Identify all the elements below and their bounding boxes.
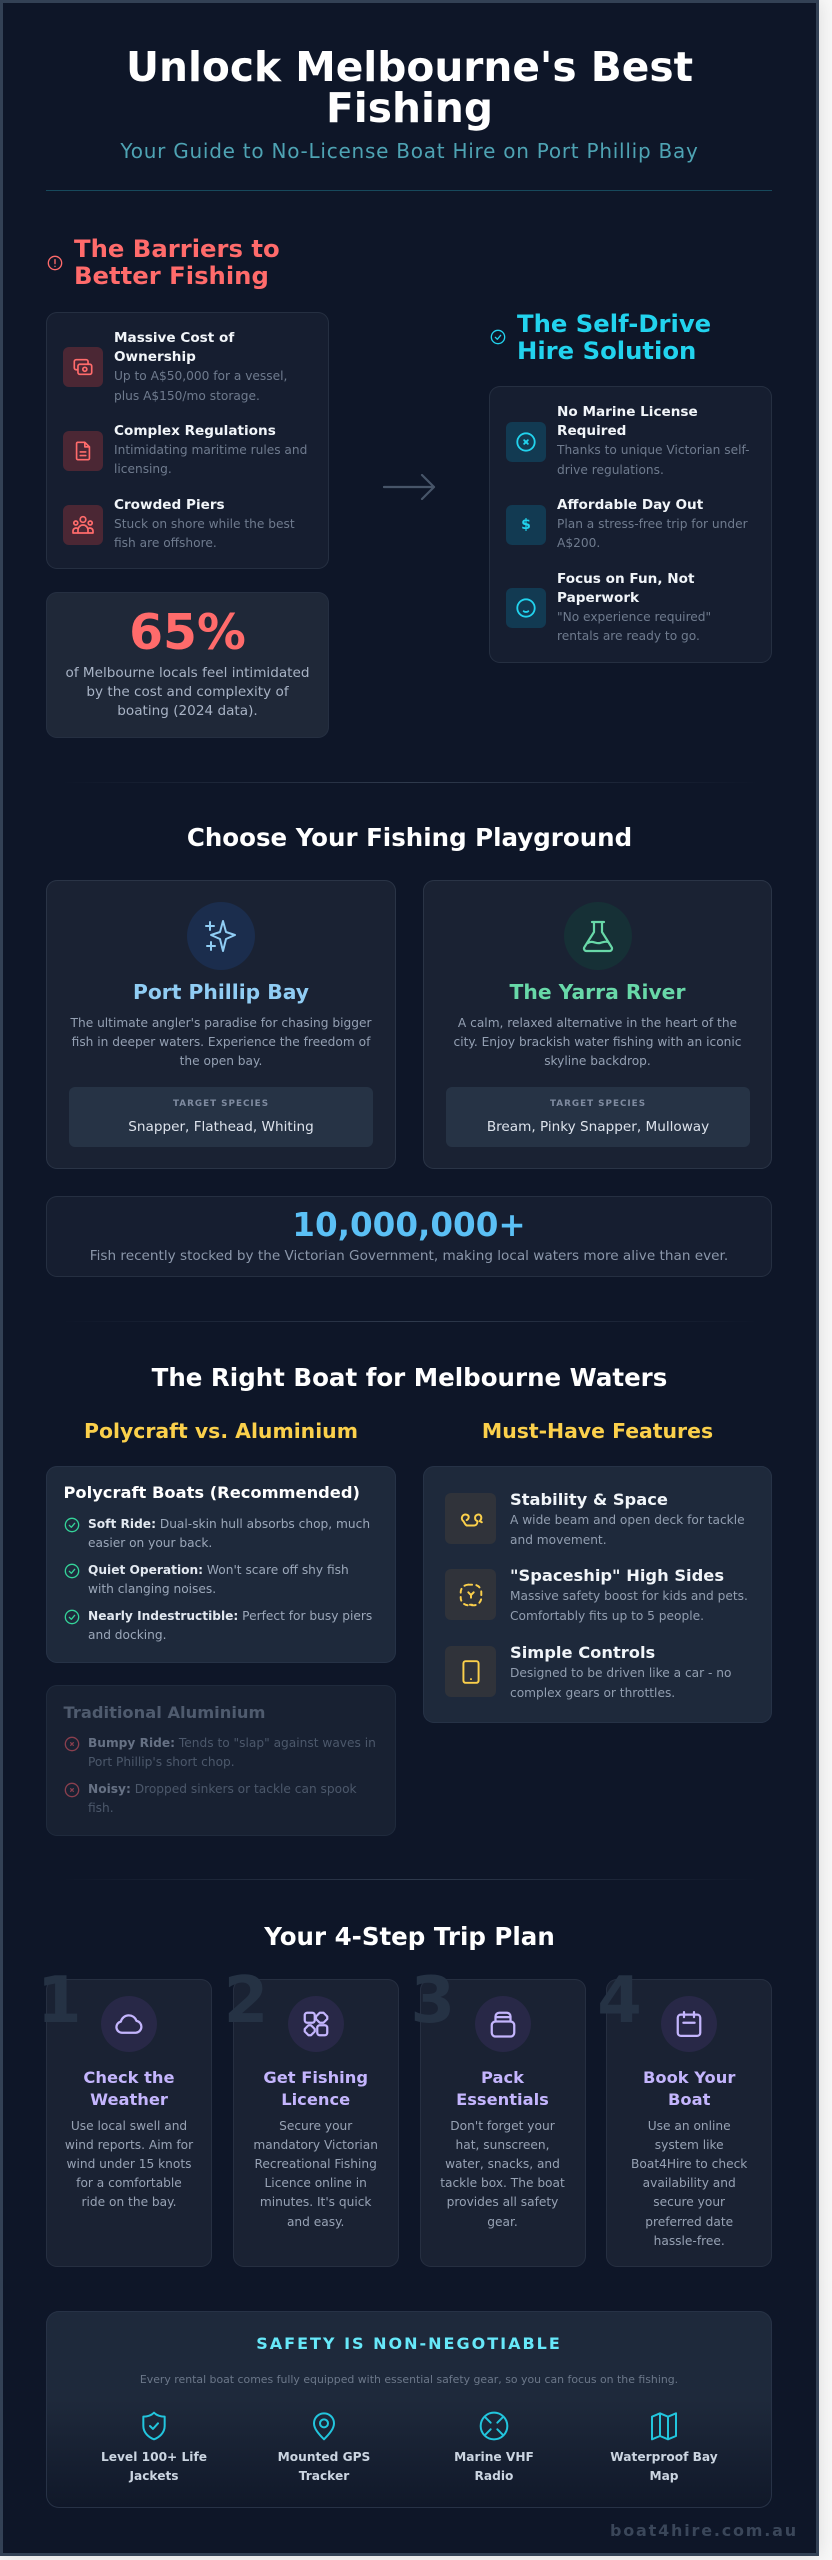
step 4 (606, 1979, 772, 2267)
icon: licence grid (288, 1996, 344, 2052)
text: regulations: Complex Regulations (114, 423, 276, 439)
pro: quiet: with clanging noises. (88, 1582, 216, 1596)
text: stability: Stability & Space (510, 1490, 668, 1509)
step text (631, 2118, 748, 2248)
icon: smile (506, 588, 546, 628)
step number: 2 (224, 1964, 268, 2038)
step title (456, 2068, 549, 2109)
item: crowded piers (63, 497, 295, 550)
pro: quiet: Quiet Operation: Won't scare off shy fish (88, 1563, 349, 1577)
text: regulations: Intimidating maritime rules and (114, 443, 307, 457)
target species (69, 1087, 373, 1147)
label: Tracker (299, 2469, 349, 2483)
panel: features (423, 1466, 772, 1723)
icon: money (63, 347, 103, 387)
step text: wind reports. Aim for (65, 2138, 193, 2152)
step title: Pack (481, 2068, 524, 2087)
icon: pin (308, 2410, 340, 2442)
step title (263, 2068, 368, 2109)
pro: soft ride: easier on your back. (88, 1536, 212, 1550)
label: Jackets (129, 2469, 179, 2483)
con: bumpy: Bumpy Ride: Tends to "slap" against waves in (88, 1736, 376, 1750)
step number: 4 (597, 1964, 642, 2038)
panel: safety (46, 2311, 772, 2508)
pro: indestructible (64, 1609, 372, 1642)
icon: tablet (445, 1646, 496, 1697)
label: Marine VHF (454, 2450, 534, 2464)
con: noisy: Noisy: Dropped sinkers or tackle can spook (88, 1782, 357, 1796)
step title: Boat (668, 2090, 710, 2109)
species label: TARGET SPECIES (173, 1099, 269, 1109)
step text: Licence online in (265, 2176, 367, 2190)
icon: group (63, 505, 103, 545)
panel: barriers (46, 312, 329, 569)
step title: Essentials (456, 2090, 549, 2109)
safety item: GPS (239, 2410, 409, 2500)
text: fun: Focus on Fun, Not (557, 571, 694, 587)
con: noisy: fish. (88, 1801, 114, 1815)
text: high sides: "Spaceship" High Sides (510, 1566, 724, 1585)
species label: TARGET SPECIES (550, 1099, 646, 1109)
icon: map (648, 2410, 680, 2442)
item: affordable (506, 497, 748, 550)
step title: Check the (83, 2068, 175, 2087)
text: massive cost: Ownership (114, 349, 196, 365)
con: bumpy (64, 1736, 376, 1769)
item: no license (506, 404, 750, 477)
place description: A calm, relaxed alternative in the heart of the (458, 1016, 737, 1030)
panel: solution (489, 386, 772, 663)
step title: Licence (281, 2090, 350, 2109)
step title: Get Fishing (263, 2068, 368, 2087)
con: noisy (64, 1782, 357, 1815)
species list: Bream, Pinky Snapper, Mulloway (487, 1119, 709, 1135)
stat number: 65% (129, 604, 246, 661)
pro: soft ride (64, 1517, 370, 1550)
text: high sides (510, 1566, 748, 1623)
safety item: radio (409, 2410, 579, 2500)
icon: barriers alert (48, 256, 62, 270)
text: stability: A wide beam and open deck for tackle (510, 1513, 745, 1527)
con: bumpy: Port Phillip's short chop. (88, 1755, 235, 1769)
step text: hat, sunscreen, (456, 2138, 549, 2152)
heading: right boat: The Right Boat for Melbourne Waters (152, 1363, 667, 1392)
text: stability: and movement. (510, 1533, 607, 1547)
step number: 3 (410, 1964, 455, 2038)
label (69, 2448, 239, 2486)
heading: solution: Hire Solution (517, 336, 696, 365)
text: affordable: Affordable Day Out (557, 497, 703, 513)
step text: Use local swell and (71, 2118, 187, 2132)
heading: playground: Choose Your Fishing Playground (187, 823, 632, 852)
place name: The Yarra River (510, 980, 685, 1004)
item: fun (506, 571, 711, 643)
stat caption: of Melbourne locals feel intimidated (66, 665, 310, 681)
place description (70, 1016, 372, 1068)
feature: controls (445, 1643, 731, 1700)
step text: minutes. It's quick (260, 2195, 372, 2209)
species list: Snapper, Flathead, Whiting (128, 1119, 314, 1135)
feature: stability (445, 1490, 745, 1547)
step text: Boat4Hire to check (631, 2157, 747, 2171)
panel: Port Phillip Bay (46, 880, 396, 1169)
label: Mounted GPS (278, 2450, 370, 2464)
stat number: 10,000,000+ (292, 1206, 526, 1244)
step text: wind under 15 knots (66, 2157, 192, 2171)
step 3 (420, 1979, 586, 2267)
icon: shield (138, 2410, 170, 2442)
panel: aluminium (46, 1685, 396, 1836)
place description: city. Enjoy brackish water fishing with an iconic (454, 1035, 741, 1049)
label: Radio (475, 2469, 513, 2483)
step text (65, 2118, 194, 2209)
step title (643, 2068, 736, 2109)
step text: secure your (653, 2195, 725, 2209)
text: controls: Designed to be driven like a car - no (510, 1666, 731, 1680)
icon: dashed frame (445, 1569, 496, 1620)
label: Map (649, 2469, 679, 2483)
text: regulations: licensing. (114, 462, 172, 476)
icon: dollar: $ (521, 517, 531, 533)
text: massive cost (114, 330, 287, 403)
heading: barriers: The Barriers to (74, 234, 280, 263)
label: Level 100+ Life (101, 2450, 207, 2464)
safety item: map (579, 2410, 749, 2500)
icon: solution check (490, 330, 506, 344)
text: regulations (114, 423, 307, 476)
panel: Yarra River (423, 880, 772, 1169)
text: crowded piers: Stuck on shore while the best (114, 517, 295, 531)
text: massive cost: Massive Cost of (114, 330, 234, 346)
step text: ride on the bay. (82, 2195, 176, 2209)
subheading: features: Must-Have Features (482, 1419, 713, 1443)
place description: skyline backdrop. (544, 1054, 651, 1068)
heading: solution: The Self-Drive (517, 309, 711, 338)
safety item: jackets (69, 2410, 239, 2500)
step text (253, 2118, 378, 2229)
text: no license: Thanks to unique Victorian self- (557, 443, 750, 457)
step text: for a comfortable (76, 2176, 182, 2190)
place description: the open bay. (180, 1054, 262, 1068)
step text: Don't forget your (450, 2118, 555, 2132)
text: fun: rentals are ready to go. (557, 629, 700, 643)
label (409, 2448, 579, 2486)
item: regulations (63, 423, 307, 476)
step text: water, snacks, and (445, 2157, 560, 2171)
step title: Book Your (643, 2068, 735, 2087)
step text: preferred date (645, 2215, 733, 2229)
text: affordable: Plan a stress-free trip for under (557, 517, 748, 531)
text: controls: complex gears or throttles. (510, 1686, 675, 1700)
text: crowded piers: fish are offshore. (114, 536, 217, 550)
watermark: boat4hire.com.au (610, 2521, 798, 2540)
text: fun (557, 571, 711, 643)
text: controls (510, 1643, 731, 1700)
aluminium title: Traditional Aluminium (64, 1703, 266, 1722)
icon: calendar (661, 1996, 717, 2052)
icon: sparkles (187, 902, 255, 970)
stat caption: by the cost and complexity of (86, 684, 289, 700)
step text (440, 2118, 565, 2229)
heading: solution (517, 309, 711, 365)
place description (454, 1016, 741, 1068)
step text: hassle-free. (654, 2234, 725, 2248)
place description: fish in deeper waters. Experience the freedom of (72, 1035, 370, 1049)
text: no license: Required (557, 423, 626, 439)
icon: dollar (506, 505, 546, 545)
text: massive cost: Up to A$50,000 for a vessel, (114, 369, 287, 383)
stat caption: boating (2024 data). (117, 703, 258, 719)
icon: x circle (506, 422, 546, 462)
panel: polycraft (46, 1466, 396, 1663)
label (579, 2448, 749, 2486)
step title: Weather (90, 2090, 168, 2109)
stat banner: fish stocked (46, 1196, 772, 1277)
text: no license: No Marine License (557, 404, 698, 420)
text: no license (557, 404, 750, 477)
text: fun: Paperwork (557, 590, 639, 606)
text: fun: "No experience required" (557, 610, 711, 624)
heading: barriers: Better Fishing (74, 261, 269, 290)
stat caption: Fish recently stocked by the Victorian Government, making local waters more alive than ever. (90, 1248, 728, 1264)
step number: 1 (37, 1964, 82, 2038)
label: Waterproof Bay (610, 2450, 718, 2464)
text: high sides: Massive safety boost for kids and pets. (510, 1589, 748, 1603)
text: no license: drive regulations. (557, 463, 664, 477)
feature: high sides (445, 1566, 748, 1623)
step text: Use an online (648, 2118, 731, 2132)
title: Fishing (326, 84, 493, 132)
heading: trip plan: Your 4-Step Trip Plan (264, 1922, 555, 1951)
text: affordable: A$200. (557, 536, 600, 550)
text: affordable (557, 497, 748, 550)
step text: Recreational Fishing (255, 2157, 377, 2171)
title: Unlock Melbourne's Best (126, 43, 693, 91)
item: massive cost (63, 330, 287, 403)
heading: barriers (74, 234, 280, 290)
arrow: problem to solution (383, 474, 436, 500)
pro: indestructible: and docking. (88, 1628, 166, 1642)
label (239, 2448, 409, 2486)
target species (446, 1087, 750, 1147)
text: massive cost: plus A$150/mo storage. (114, 389, 260, 403)
step text: availability and (643, 2176, 736, 2190)
pro: indestructible: Nearly Indestructible: Perfect for busy piers (88, 1609, 372, 1623)
icon: lifebuoy (478, 2410, 510, 2442)
subtitle: Your Guide to No-License Boat Hire on Port Phillip Bay (120, 139, 699, 163)
step title (83, 2068, 175, 2109)
stat card: 65% (46, 592, 329, 738)
icon: stability (445, 1493, 496, 1544)
text: stability (510, 1490, 745, 1547)
step text: system like (655, 2138, 724, 2152)
safety description: Every rental boat comes fully equipped with essential safety gear, so you can focus on the fishing. (140, 2373, 678, 2386)
text: crowded piers (114, 497, 295, 550)
icon: flask (564, 902, 632, 970)
step 2 (233, 1979, 399, 2267)
title (126, 43, 693, 132)
text: high sides: Comfortably fits up to 5 people. (510, 1609, 704, 1623)
step text: gear. (487, 2215, 518, 2229)
polycraft title: Polycraft Boats (Recommended) (64, 1483, 360, 1502)
pro: soft ride: Soft Ride: Dual-skin hull absorbs chop, much (88, 1517, 370, 1531)
text: controls: Simple Controls (510, 1643, 655, 1662)
subheading: polycraft vs aluminium: Polycraft vs. Aluminium (84, 1419, 358, 1443)
stat caption (66, 665, 310, 719)
icon: bag (474, 1996, 530, 2052)
place description: The ultimate angler's paradise for chasing bigger (71, 1016, 371, 1030)
step text: Secure your (279, 2118, 352, 2132)
step text: tackle box. The boat (440, 2176, 565, 2190)
step text: provides all safety (447, 2195, 558, 2209)
place name: Port Phillip Bay (133, 980, 309, 1004)
icon: document (63, 431, 103, 471)
step text: mandatory Victorian (253, 2138, 378, 2152)
step 1 (46, 1979, 212, 2267)
pro: quiet (64, 1563, 349, 1596)
safety title: SAFETY IS NON-NEGOTIABLE (256, 2334, 562, 2353)
icon: cloud (101, 1996, 157, 2052)
step text: and easy. (287, 2215, 344, 2229)
text: crowded piers: Crowded Piers (114, 497, 225, 513)
